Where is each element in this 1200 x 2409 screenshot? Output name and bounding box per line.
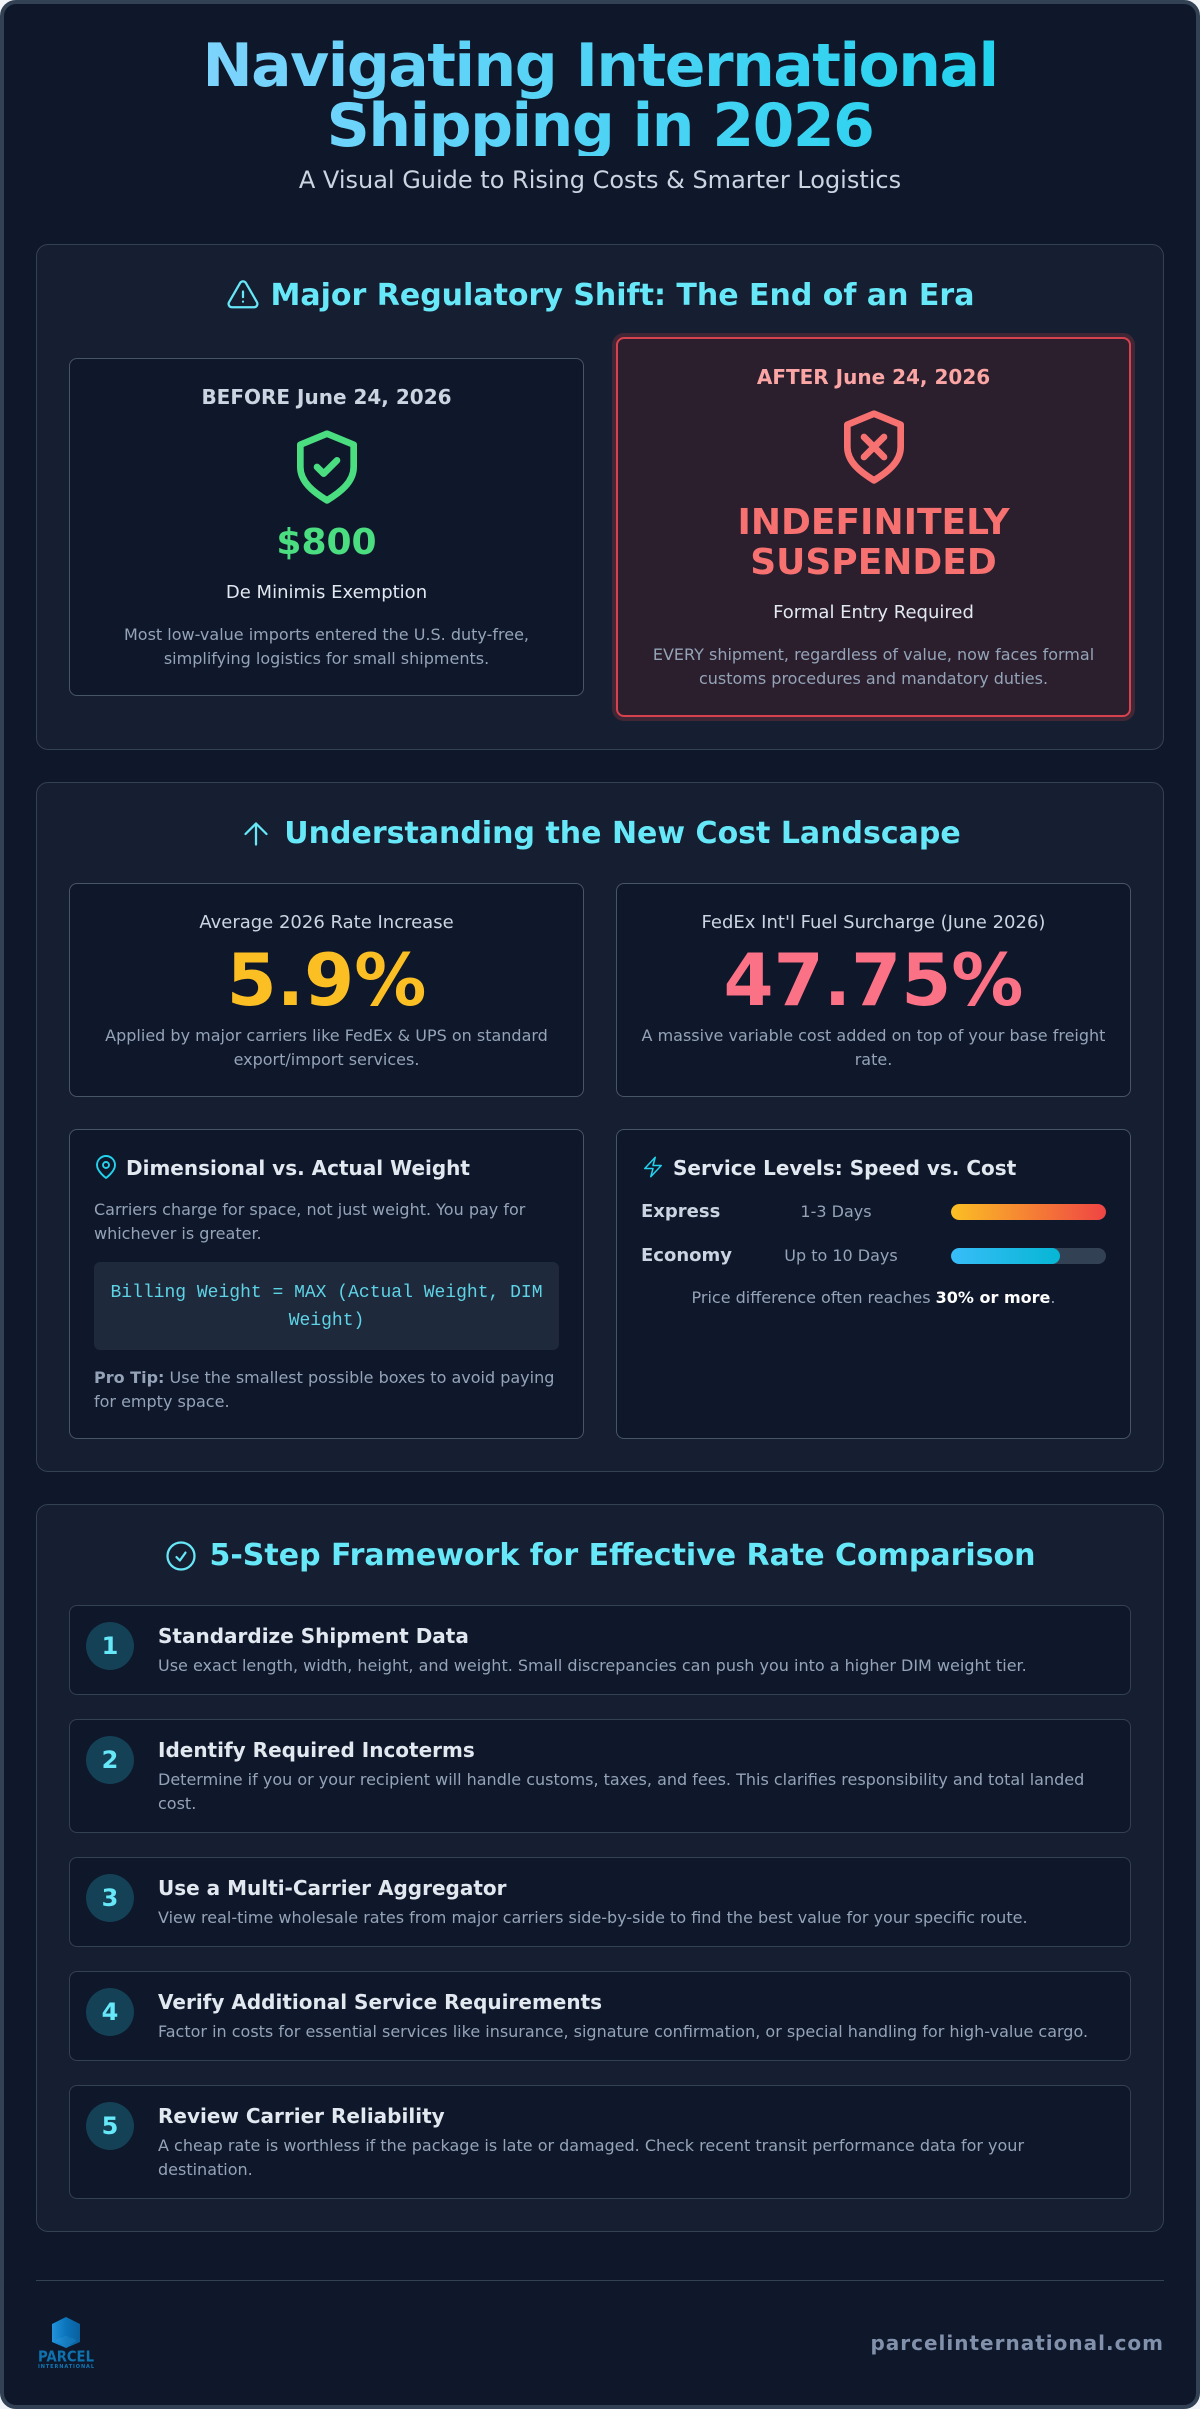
- pro tip: [94, 1368, 554, 1411]
- step 3 title: Use a Multi-Carrier Aggregator: [158, 1876, 507, 1900]
- pro tip: for empty space.: [94, 1392, 230, 1411]
- step 2 description: cost.: [158, 1794, 196, 1813]
- icon: pin: [96, 1155, 116, 1179]
- before label: BEFORE June 24, 2026: [201, 385, 452, 409]
- panel: cost landscape: [36, 782, 1164, 1472]
- step 3 description: View real-time wholesale rates from major carriers side-by-side to find the best value for your specific route.: [158, 1908, 1028, 1927]
- suspended value: INDEFINITELY: [737, 502, 1010, 543]
- card title: Dimensional vs. Actual Weight: [126, 1156, 470, 1180]
- after description: EVERY shipment, regardless of value, now faces formal: [653, 645, 1094, 664]
- step 2 description: Determine if you or your recipient will handle customs, taxes, and fees. This clarifies responsibility and total landed: [158, 1770, 1084, 1789]
- card: after June 24: [616, 337, 1131, 717]
- formula box: Weight): [289, 1311, 364, 1331]
- number 5: [86, 2102, 134, 2150]
- card description: [94, 1200, 526, 1243]
- stat: fuel surcharge: [616, 883, 1131, 1097]
- suspended value: [737, 502, 1010, 583]
- icon: green shield check: [297, 430, 357, 504]
- step 1 description: Use exact length, width, height, and weight. Small discrepancies can push you into a higher DIM weight tier.: [158, 1656, 1027, 1675]
- after label: AFTER June 24, 2026: [757, 365, 990, 389]
- card: dimensional weight: [69, 1129, 584, 1439]
- step 2 description: [158, 1770, 1084, 1813]
- title: Shipping in 2026: [327, 91, 873, 161]
- number 2: [86, 1736, 134, 1784]
- after description: [653, 645, 1094, 688]
- row: economy: [641, 1245, 1106, 1266]
- stat description: [642, 1026, 1105, 1069]
- stat value 47.75%: 47.75%: [724, 938, 1023, 1022]
- express label: Express: [641, 1201, 720, 1222]
- logo: Parcel International: [38, 2317, 95, 2370]
- stat description: [105, 1026, 548, 1069]
- step 5 title: Review Carrier Reliability: [158, 2104, 445, 2128]
- panel: regulatory shift: [36, 244, 1164, 750]
- card description: Carriers charge for space, not just weight. You pay for: [94, 1200, 525, 1219]
- $800 value: $800: [276, 522, 377, 563]
- subtitle: A Visual Guide to Rising Costs & Smarter Logistics: [299, 166, 901, 194]
- step 1: [69, 1605, 1131, 1695]
- formal entry: Formal Entry Required: [773, 602, 974, 623]
- before description: [124, 625, 529, 668]
- row: express: [641, 1201, 1106, 1222]
- step 4 description: Factor in costs for essential services like insurance, signature confirmation, or special handling for high-value cargo.: [158, 2022, 1088, 2041]
- step 1 title: Standardize Shipment Data: [158, 1624, 469, 1648]
- economy bar: [951, 1248, 1106, 1264]
- icon: bolt: [644, 1156, 662, 1178]
- title: [202, 31, 998, 161]
- number 2: 2: [102, 1746, 118, 1774]
- step 5 description: A cheap rate is worthless if the package is late or damaged. Check recent transit performance data for your: [158, 2136, 1024, 2155]
- express time: 1-3 Days: [800, 1202, 872, 1221]
- title: Navigating International: [202, 31, 998, 101]
- stat: rate increase: [69, 883, 584, 1097]
- exemption name: De Minimis Exemption: [226, 582, 427, 603]
- formula box: [94, 1262, 559, 1350]
- footer website: parcelinternational.com: [870, 2331, 1164, 2355]
- stat description: Applied by major carriers like FedEx & UPS on standard: [105, 1026, 548, 1045]
- card title: Service Levels: Speed vs. Cost: [673, 1156, 1016, 1180]
- step 2 title: Identify Required Incoterms: [158, 1738, 475, 1762]
- card: service levels: [616, 1129, 1131, 1439]
- number 4: [86, 1988, 134, 2036]
- after description: customs procedures and mandatory duties.: [699, 669, 1048, 688]
- number 3: [86, 1874, 134, 1922]
- card description: whichever is greater.: [94, 1224, 262, 1243]
- number 3: 3: [102, 1884, 118, 1912]
- heading: regulatory shift: Major Regulatory Shift: The End of an Era: [271, 278, 974, 313]
- step 4 title: Verify Additional Service Requirements: [158, 1990, 602, 2014]
- number 1: 1: [102, 1632, 118, 1660]
- before description: Most low-value imports entered the U.S. duty-free,: [124, 625, 529, 644]
- express bar: [951, 1204, 1106, 1220]
- formula box: Billing Weight = MAX (Actual Weight, DIM: [110, 1283, 543, 1303]
- pro tip: Pro Tip: Use the smallest possible boxes to avoid paying: [94, 1368, 554, 1387]
- economy time: Up to 10 Days: [784, 1246, 898, 1265]
- stat label: Average 2026 Rate Increase: [199, 912, 454, 933]
- stat description: rate.: [855, 1050, 892, 1069]
- before description: simplifying logistics for small shipments.: [164, 649, 489, 668]
- stat description: export/import services.: [234, 1050, 419, 1069]
- heading: cost landscape: Understanding the New Cost Landscape: [284, 816, 961, 851]
- stat label: FedEx Int'l Fuel Surcharge (June 2026): [702, 912, 1045, 933]
- step 5: [69, 2085, 1131, 2199]
- step 5 description: [158, 2136, 1024, 2179]
- number 5: 5: [102, 2112, 118, 2140]
- heading: framework: 5-Step Framework for Effective Rate Comparison: [209, 1538, 1036, 1573]
- panel: 5-step framework: [36, 1504, 1164, 2232]
- suspended value: SUSPENDED: [750, 542, 997, 583]
- step 2: [69, 1719, 1131, 1833]
- icon: red shield x: [844, 410, 904, 484]
- step 5 description: destination.: [158, 2160, 253, 2179]
- stat value 5.9%: 5.9%: [227, 938, 426, 1022]
- price difference note: Price difference often reaches 30% or more.: [692, 1288, 1055, 1307]
- stat description: A massive variable cost added on top of your base freight: [642, 1026, 1105, 1045]
- card: before June 24: [69, 358, 584, 696]
- step 4: [69, 1971, 1131, 2061]
- number 1: [86, 1622, 134, 1670]
- step 3: [69, 1857, 1131, 1947]
- economy label: Economy: [641, 1245, 732, 1266]
- number 4: 4: [102, 1998, 118, 2026]
- logo: Parcel International: INTERNATIONAL: [38, 2364, 95, 2370]
